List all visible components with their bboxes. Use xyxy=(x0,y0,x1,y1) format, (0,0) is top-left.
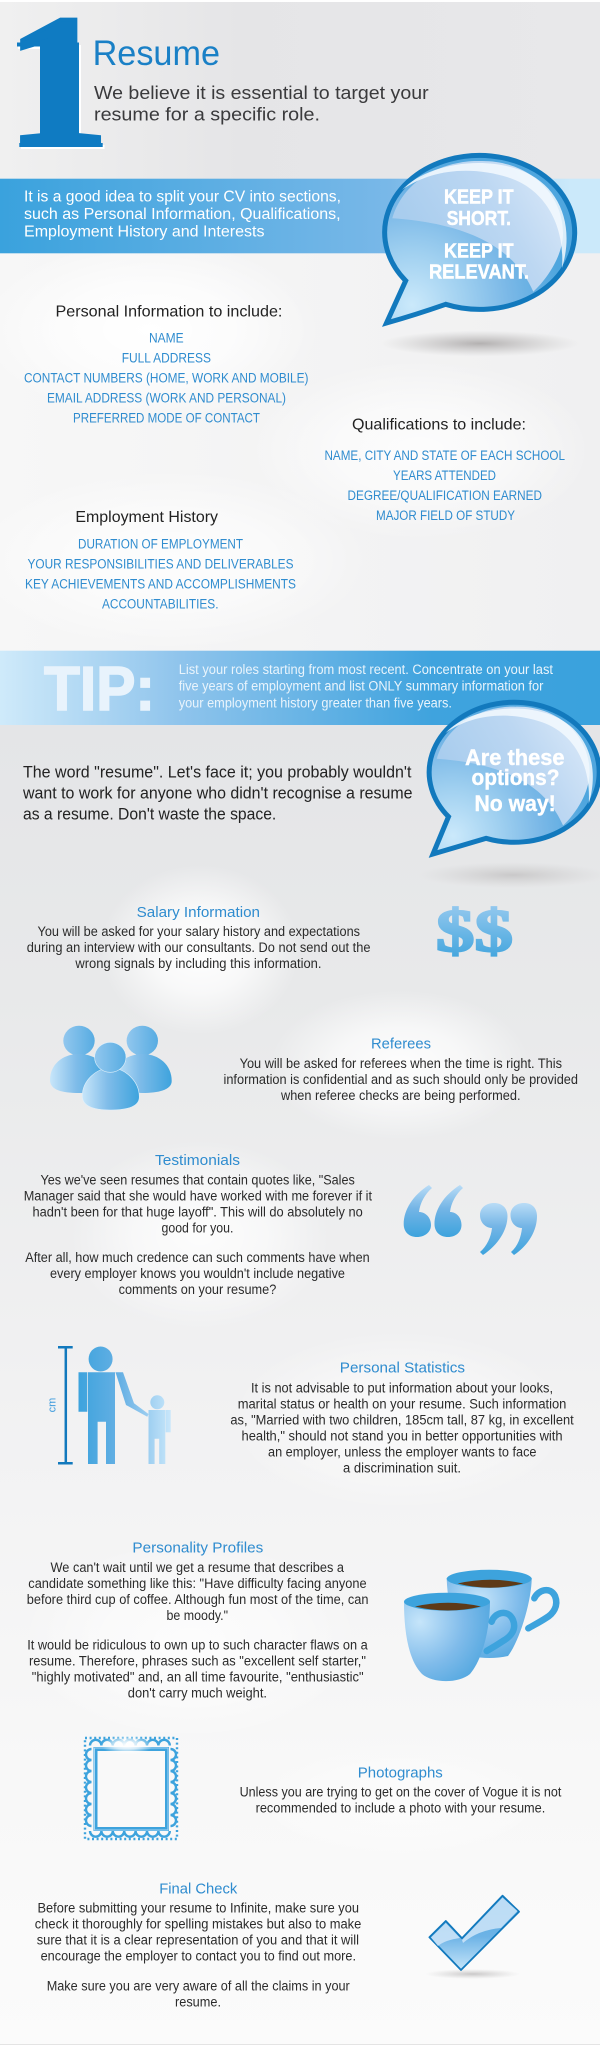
section: personal statistics: a discrimination suit. xyxy=(343,1460,461,1475)
employment history list xyxy=(25,509,296,612)
personal information list xyxy=(24,304,308,425)
section: final check: Final Check xyxy=(159,1880,238,1897)
qualifications list: Qualifications to include: xyxy=(352,416,526,433)
section: photographs xyxy=(240,1764,562,1816)
section: personality profiles: We can't wait until we get a resume that describes a xyxy=(50,1560,344,1575)
speech bubble: keep it short: KEEP IT xyxy=(444,186,514,208)
section: testimonials: After all, how much credence can such comments have when xyxy=(25,1250,370,1265)
intro text: We believe it is essential to target your xyxy=(94,82,429,103)
personal information list: NAME xyxy=(149,330,184,345)
employment history list: YOUR RESPONSIBILITIES AND DELIVERABLES xyxy=(28,557,294,572)
banner: sections xyxy=(0,179,600,253)
resume word text: The word "resume". Let's face it; you probably wouldn't xyxy=(23,764,412,782)
personal information list: FULL ADDRESS xyxy=(122,350,211,365)
icon: dollar signs: $$ xyxy=(436,898,513,964)
section: final check: sure that it is a clear representation of you and that it will xyxy=(37,1933,359,1948)
section: salary information xyxy=(27,904,371,971)
icon: picture frame xyxy=(85,1735,177,1839)
checkmark shadow xyxy=(425,1969,521,1979)
banner: sections: Employment History and Interests xyxy=(24,224,265,241)
title: Resume xyxy=(93,34,220,73)
section: testimonials xyxy=(24,1152,372,1297)
section: final check: Make sure you are very aware of all the claims in your xyxy=(47,1978,350,1993)
section: referees: information is confidential and as such should only be provided xyxy=(224,1072,578,1087)
section: referees: You will be asked for referees when the time is right. This xyxy=(240,1056,562,1071)
section: personality profiles xyxy=(27,1540,369,1701)
section: personal statistics: as, "Married with two children, 185cm tall, 87 kg, in excellent xyxy=(230,1412,574,1427)
intro text: resume for a specific role. xyxy=(94,104,320,125)
section: personality profiles: "highly motivated" and, an all time favourite, "enthusiastic" xyxy=(32,1670,364,1685)
icon: adult and child xyxy=(78,1346,171,1464)
resume word text xyxy=(22,764,413,823)
speech bubble: keep it short: SHORT. xyxy=(447,208,511,230)
section: photographs: recommended to include a photo with your resume. xyxy=(256,1801,545,1816)
qualifications list: YEARS ATTENDED xyxy=(393,468,496,483)
speech bubble: are these options: Are these xyxy=(465,745,564,770)
qualifications list xyxy=(324,416,565,523)
section: personal statistics: It is not advisable to put information about your looks, xyxy=(251,1380,553,1395)
banner: sections: It is a good idea to split your CV into sections, xyxy=(24,189,341,206)
section: personality profiles: resume. Therefore, phrases such as "excellent self starter," xyxy=(29,1654,366,1669)
personal information list: EMAIL ADDRESS (WORK AND PERSONAL) xyxy=(47,390,286,405)
section: testimonials: Yes we've seen resumes that contain quotes like, "Sales xyxy=(40,1172,355,1187)
personal information list: PREFERRED MODE OF CONTACT xyxy=(73,410,260,425)
section: testimonials: comments on your resume? xyxy=(119,1282,276,1297)
intro text xyxy=(94,82,429,125)
section: salary information: during an interview with our consultants. Do not send out the xyxy=(27,940,371,955)
section: referees: when referee checks are being performed. xyxy=(280,1088,520,1103)
icon: coffee cups xyxy=(404,1570,556,1681)
icon: quotation marks xyxy=(404,1185,537,1255)
speech bubble: keep it short: KEEP IT xyxy=(444,240,514,262)
employment history list: DURATION OF EMPLOYMENT xyxy=(78,537,243,552)
section: personality profiles: don't carry much weight. xyxy=(128,1686,267,1701)
section: final check: check it thoroughly for spelling mistakes but also to make xyxy=(35,1917,361,1932)
personal information list: CONTACT NUMBERS (HOME, WORK AND MOBILE) xyxy=(24,370,308,385)
icon: people xyxy=(50,1026,172,1110)
icon: height ruler: cm xyxy=(46,1398,58,1412)
bubble shadow xyxy=(380,330,580,356)
section: referees xyxy=(224,1036,578,1103)
section: salary information: You will be asked for your salary history and expectations xyxy=(38,924,360,939)
employment history list: Employment History xyxy=(75,509,218,526)
section: final check: encourage the employer to contact you to find out more. xyxy=(41,1949,356,1964)
section: testimonials: good for you. xyxy=(162,1220,233,1235)
section: referees: Referees xyxy=(371,1036,431,1053)
section: personality profiles: It would be ridiculous to own up to such character flaws on a xyxy=(27,1638,368,1653)
tip banner: five years of employment and list ONLY summary information for xyxy=(179,679,544,694)
speech bubble: are these options xyxy=(429,702,599,854)
tip banner xyxy=(0,651,600,725)
section: personal statistics: marital status or health on your resume. Such information xyxy=(238,1396,566,1411)
tip banner: List your roles starting from most recent. Concentrate on your last xyxy=(179,662,553,677)
section: personal statistics: an employer, unless the employer wants to face xyxy=(268,1444,536,1459)
resume word text: want to work for anyone who didn't recognise a resume xyxy=(22,784,413,802)
employment history list: KEY ACHIEVEMENTS AND ACCOMPLISHMENTS xyxy=(25,577,296,592)
speech bubble: keep it short: RELEVANT. xyxy=(429,261,529,283)
section: testimonials: Manager said that she would have worked with me forever if it xyxy=(24,1188,372,1203)
section: final check: resume. xyxy=(175,1994,221,2009)
section: final check xyxy=(35,1880,361,2009)
section: testimonials: hadn't been for that huge layoff". This will do absolutely no xyxy=(32,1204,363,1219)
qualifications list: MAJOR FIELD OF STUDY xyxy=(376,508,515,523)
section: photographs: Unless you are trying to get on the cover of Vogue it is not xyxy=(240,1785,562,1800)
employment history list: ACCOUNTABILITIES. xyxy=(102,597,218,612)
section: testimonials: Testimonials xyxy=(155,1152,240,1169)
section: personal statistics xyxy=(230,1360,574,1475)
section: personal statistics: health," should not stand you in better opportunities with xyxy=(242,1428,563,1443)
section: testimonials: every employer knows you wouldn't include negative xyxy=(50,1266,345,1281)
section: salary information: Salary Information xyxy=(137,904,260,921)
resume word text: as a resume. Don't waste the space. xyxy=(23,805,276,823)
tip banner: TIP: xyxy=(44,654,155,724)
section: personality profiles: before third cup of coffee. Although fun most of the time, can xyxy=(27,1592,369,1607)
icon: height ruler xyxy=(46,1347,73,1463)
qualifications list: NAME, CITY AND STATE OF EACH SCHOOL xyxy=(324,448,565,463)
speech bubble: are these options: No way! xyxy=(474,791,556,816)
section: photographs: Photographs xyxy=(358,1764,443,1781)
section: salary information: wrong signals by including this information. xyxy=(74,956,322,971)
icon: check mark xyxy=(429,1896,519,1970)
speech bubble: are these options: options? xyxy=(472,765,560,790)
section: personality profiles: candidate something like this: "Have difficulty facing anyone xyxy=(28,1576,367,1591)
speech bubble: keep it short xyxy=(385,155,575,323)
qualifications list: DEGREE/QUALIFICATION EARNED xyxy=(348,488,542,503)
banner: sections: such as Personal Information, Qualifications, xyxy=(24,206,341,223)
section: personality profiles: Personality Profiles xyxy=(132,1540,263,1557)
bubble shadow xyxy=(418,862,600,888)
tip banner: your employment history greater than five years. xyxy=(179,696,452,711)
section: personality profiles: be moody." xyxy=(166,1608,228,1623)
personal information list: Personal Information to include: xyxy=(56,304,282,321)
section: personal statistics: Personal Statistics xyxy=(340,1360,465,1377)
section: final check: Before submitting your resume to Infinite, make sure you xyxy=(38,1901,359,1916)
